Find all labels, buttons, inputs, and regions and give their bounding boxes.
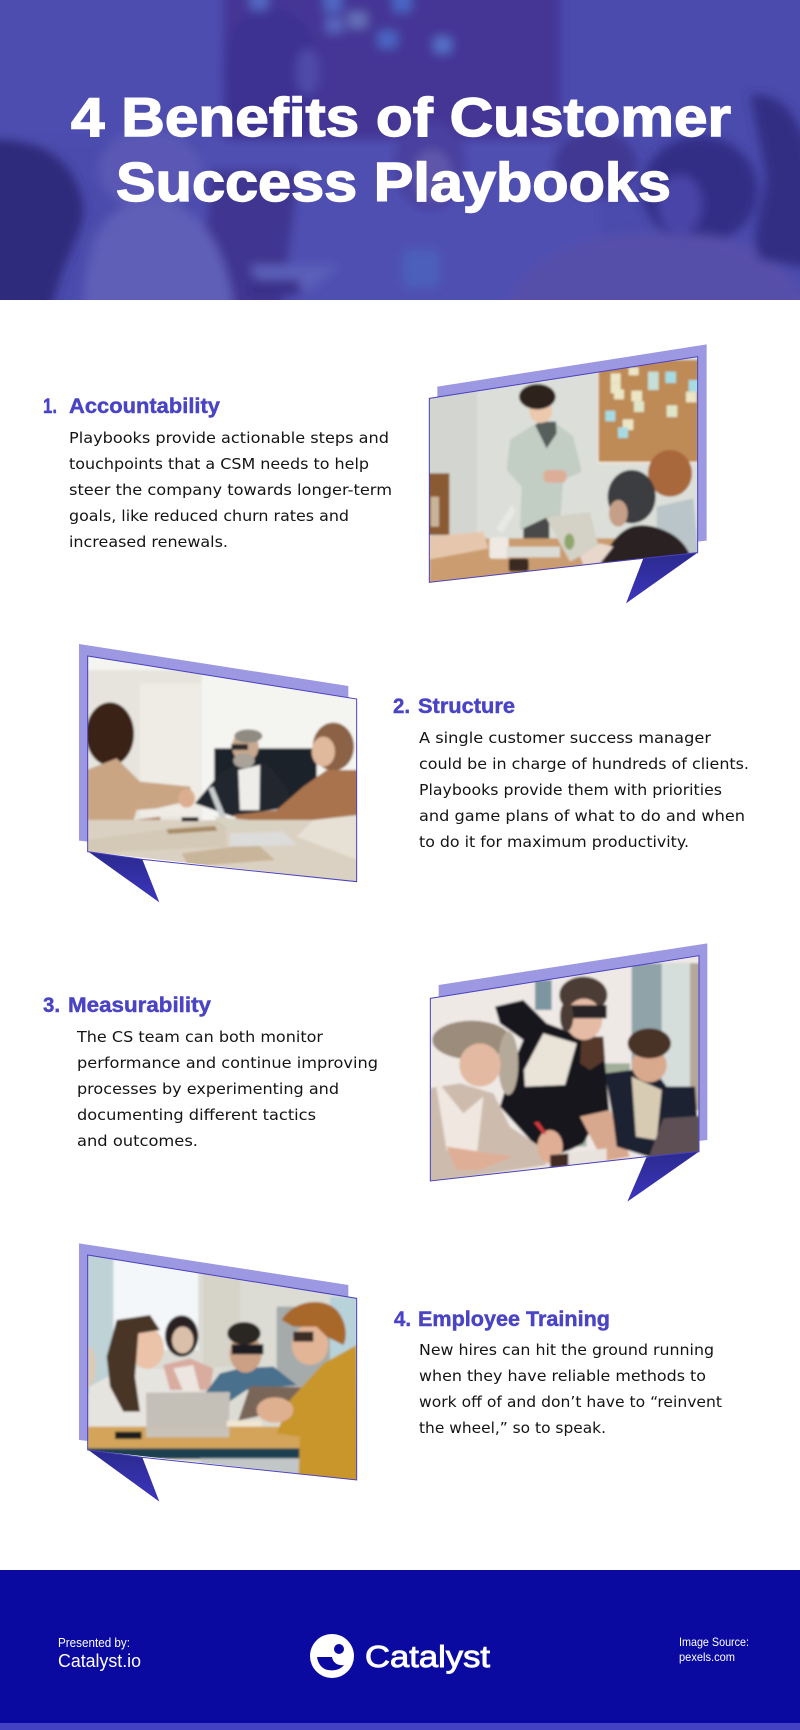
title: 4 Benefits of Customer bbox=[71, 86, 731, 148]
presented by credit bbox=[58, 1636, 141, 1671]
title bbox=[71, 86, 731, 213]
presented by credit: Catalyst.io bbox=[58, 1651, 141, 1671]
body text 2: to do it for maximum productivity. bbox=[419, 833, 689, 851]
body text 4: the wheel,” so to speak. bbox=[419, 1419, 606, 1437]
body text 2: Playbooks provide them with priorities bbox=[419, 781, 722, 799]
section 3: measurability bbox=[43, 943, 707, 1202]
logo wordmark: Catalyst bbox=[365, 1639, 490, 1674]
section 2: structure bbox=[79, 644, 749, 902]
heading 1: 1. bbox=[43, 395, 57, 418]
body text 4: New hires can hit the ground running bbox=[419, 1341, 714, 1359]
body text 4: when they have reliable methods to bbox=[419, 1367, 706, 1385]
handshake photo bbox=[86, 653, 360, 887]
body text 1: Playbooks provide actionable steps and bbox=[69, 429, 389, 447]
lavender backing shape bbox=[79, 1243, 348, 1470]
heading 1: Accountability bbox=[69, 395, 220, 418]
heading 4: 4. bbox=[394, 1308, 411, 1331]
photo border bbox=[88, 1255, 357, 1480]
speech tail bbox=[88, 852, 159, 902]
body text 1: increased renewals. bbox=[69, 533, 228, 551]
body text 1: goals, like reduced churn rates and bbox=[69, 507, 349, 525]
header banner bbox=[0, 0, 800, 320]
header background photo with purple tint bbox=[0, 0, 800, 320]
body text 3: performance and continue improving bbox=[77, 1054, 378, 1072]
heading 4: Employee Training bbox=[418, 1308, 610, 1331]
lavender backing shape bbox=[439, 943, 707, 1170]
heading 3: 3. bbox=[43, 994, 60, 1017]
colleagues at laptop photo bbox=[428, 953, 702, 1187]
photo border bbox=[88, 656, 357, 882]
heading 2: Structure bbox=[418, 695, 515, 718]
body text 3: and outcomes. bbox=[77, 1132, 198, 1150]
meeting room photo bbox=[427, 353, 700, 587]
body text 4: work off of and don’t have to “reinvent bbox=[419, 1393, 722, 1411]
image source credit: pexels.com bbox=[679, 1650, 735, 1664]
photo card 4 bbox=[79, 1243, 358, 1502]
image source credit: Image Source: bbox=[679, 1635, 749, 1649]
body text 2 bbox=[419, 729, 749, 851]
body text 2: A single customer success manager bbox=[419, 729, 712, 747]
presented by credit: Presented by: bbox=[58, 1636, 130, 1650]
lavender backing shape bbox=[79, 644, 348, 870]
logo mark bbox=[310, 1634, 354, 1678]
body text 1: steer the company towards longer-term bbox=[69, 481, 392, 499]
section 1: accountability bbox=[43, 344, 707, 603]
speech tail bbox=[88, 1450, 159, 1502]
body text 4 bbox=[419, 1341, 722, 1437]
image source credit bbox=[679, 1635, 749, 1664]
heading 3: Measurability bbox=[68, 994, 211, 1017]
body text 3: documenting different tactics bbox=[77, 1106, 316, 1124]
team with laptop photo bbox=[83, 1253, 358, 1483]
speech tail bbox=[627, 1152, 699, 1202]
footer bbox=[0, 1570, 800, 1730]
speech tail bbox=[626, 553, 698, 603]
body text 2: could be in charge of hundreds of clients. bbox=[419, 755, 749, 773]
section 4: employee training bbox=[79, 1243, 722, 1502]
photo border bbox=[429, 357, 698, 582]
photo card 3 bbox=[428, 943, 707, 1202]
footer accent strip bbox=[0, 1723, 800, 1730]
body text 1: touchpoints that a CSM needs to help bbox=[69, 455, 369, 473]
body text 1 bbox=[69, 429, 392, 551]
body text 3: The CS team can both monitor bbox=[76, 1028, 324, 1046]
catalyst logo bbox=[310, 1634, 490, 1678]
photo card 1 bbox=[427, 344, 707, 603]
heading 2: 2. bbox=[393, 695, 410, 718]
body text 3 bbox=[76, 1028, 378, 1150]
body text 2: and game plans of what to do and when bbox=[419, 807, 745, 825]
title: Success Playbooks bbox=[116, 151, 671, 213]
body text 3: processes by experimenting and bbox=[77, 1080, 339, 1098]
footer band bbox=[0, 1570, 800, 1723]
photo card 2 bbox=[79, 644, 360, 902]
photo border bbox=[430, 956, 699, 1181]
lavender backing shape bbox=[437, 344, 707, 570]
